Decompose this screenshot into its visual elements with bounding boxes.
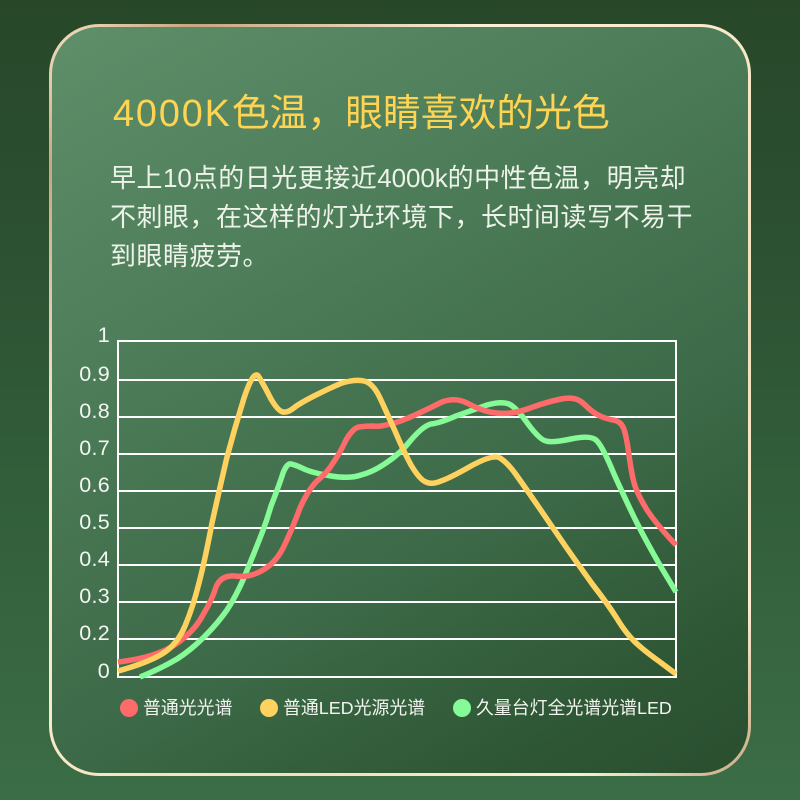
- y axis labels: 0.2: [79, 621, 110, 645]
- y axis labels: 0.5: [79, 510, 110, 534]
- y axis labels: 0.6: [79, 473, 110, 497]
- curve: ordinary LED (yellow): [118, 375, 676, 674]
- legend item: full-spectrum LED lamp: 久量台灯全光谱光谱LED: [476, 698, 672, 718]
- curve: full-spectrum LED lamp (green): [140, 403, 676, 677]
- curve: ordinary light (red): [118, 398, 676, 662]
- y axis labels: 0.3: [79, 584, 110, 608]
- grid lines and frame: [118, 341, 676, 677]
- text block: description: 早上10点的日光更接近4000k的中性色温，明亮却: [110, 163, 686, 193]
- text block: description: 到眼睛疲劳。: [110, 241, 269, 271]
- text block: description: 不刺眼，在这样的灯光环境下，长时间读写不易干: [110, 202, 693, 232]
- legend: [120, 698, 672, 718]
- title: 4000K色温，眼睛喜欢的光色: [113, 93, 610, 135]
- y axis labels: 0.4: [79, 547, 110, 571]
- y axis labels: 0: [98, 659, 110, 683]
- y axis labels: 0.8: [79, 399, 110, 423]
- y axis labels: 1: [98, 323, 110, 347]
- legend item: ordinary LED: 普通LED光源光谱: [283, 698, 425, 718]
- text block: description: [110, 163, 693, 271]
- legend item: ordinary light: 普通光光谱: [143, 698, 232, 718]
- y axis labels: 0.7: [79, 436, 110, 460]
- y axis labels: [79, 323, 110, 683]
- y axis labels: 0.9: [79, 362, 110, 386]
